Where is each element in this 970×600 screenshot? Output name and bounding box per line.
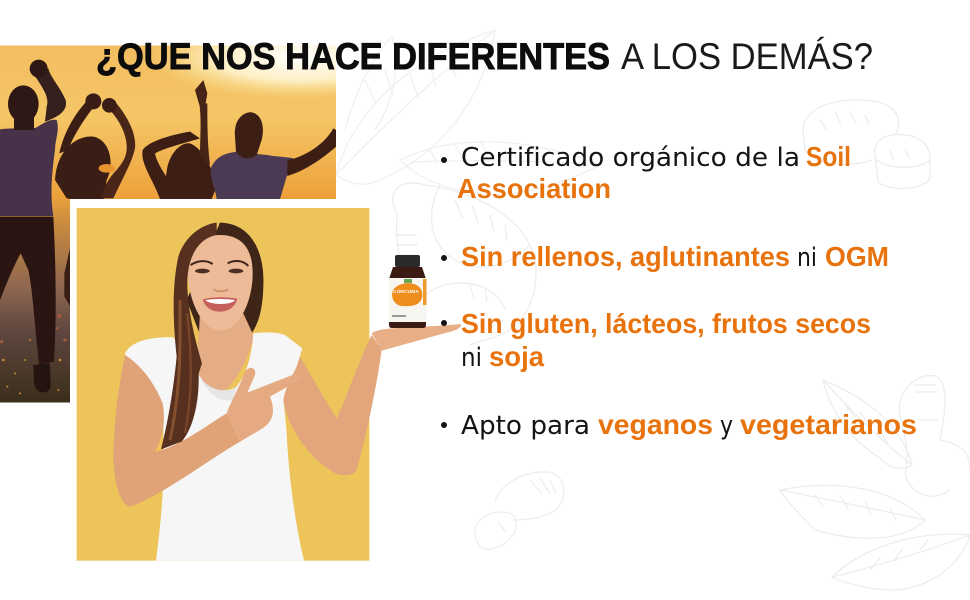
- bullet: sin gluten: [441, 308, 871, 373]
- background illustration: leaves and root bottom right: [780, 376, 970, 590]
- bullet: veganos: [441, 409, 917, 441]
- bullet: Soil Association: [441, 141, 851, 204]
- hair back: [187, 223, 263, 343]
- arm: right arm holding the product: [283, 335, 382, 475]
- photo: woman on yellow background: [77, 208, 461, 561]
- arm: left arm and forearm: [113, 355, 240, 507]
- meadow flowers: [2, 339, 61, 394]
- shirt shadow: [200, 377, 237, 401]
- shirt: [125, 333, 304, 561]
- bullet: Soil Association: Certificado orgánico de la: [461, 143, 800, 173]
- silhouette: third person: [142, 132, 217, 199]
- bottle label: [389, 278, 426, 322]
- hair front strand: [161, 223, 217, 449]
- eyes and brows: [191, 261, 248, 273]
- title: A LOS DEMÁS?: [621, 36, 873, 77]
- bullet: sin gluten: soja: [489, 341, 544, 372]
- bullet: sin rellenos: ni: [797, 243, 817, 273]
- hand pointing: [227, 368, 300, 442]
- bullet: sin gluten: Sin gluten, lácteos, frutos secos: [461, 308, 871, 339]
- bottle label name: CÚRCUMA: [393, 288, 420, 294]
- bullet: veganos: y: [720, 411, 733, 441]
- bullet: sin rellenos: OGM: [825, 241, 889, 272]
- silhouette: raised arm: [199, 103, 210, 165]
- bullet: sin rellenos: Sin rellenos, aglutinantes: [461, 241, 790, 272]
- product bottle: [389, 255, 426, 328]
- bullet: veganos: Apto para: [461, 411, 590, 441]
- bullet: sin gluten: ni: [461, 343, 482, 373]
- photo: friends jumping at sunset: [0, 46, 336, 402]
- bullet: veganos: vegetarianos: [740, 409, 917, 440]
- background illustration: turmeric leaves top: [336, 30, 600, 195]
- face: [187, 235, 253, 331]
- panel: white photo frame: [70, 199, 376, 568]
- title: ¿QUE NOS HACE DIFERENTES: [96, 36, 610, 77]
- background illustration: capsules top right: [803, 100, 930, 188]
- silhouette: second person: [55, 93, 135, 307]
- background illustration: capsules bottom: [475, 472, 564, 549]
- smile: [203, 297, 237, 312]
- silhouette: man on the right: [211, 112, 336, 199]
- bottle cap: [395, 255, 420, 267]
- background illustration: turmeric root: [393, 183, 536, 345]
- bullet: veganos: veganos: [598, 409, 713, 440]
- neck: [197, 313, 254, 394]
- bullet: Soil Association: Soil: [806, 141, 851, 172]
- nose shadow: [213, 289, 228, 291]
- silhouette: man on the left: [0, 60, 66, 393]
- bullet: Soil Association: Association: [457, 173, 611, 204]
